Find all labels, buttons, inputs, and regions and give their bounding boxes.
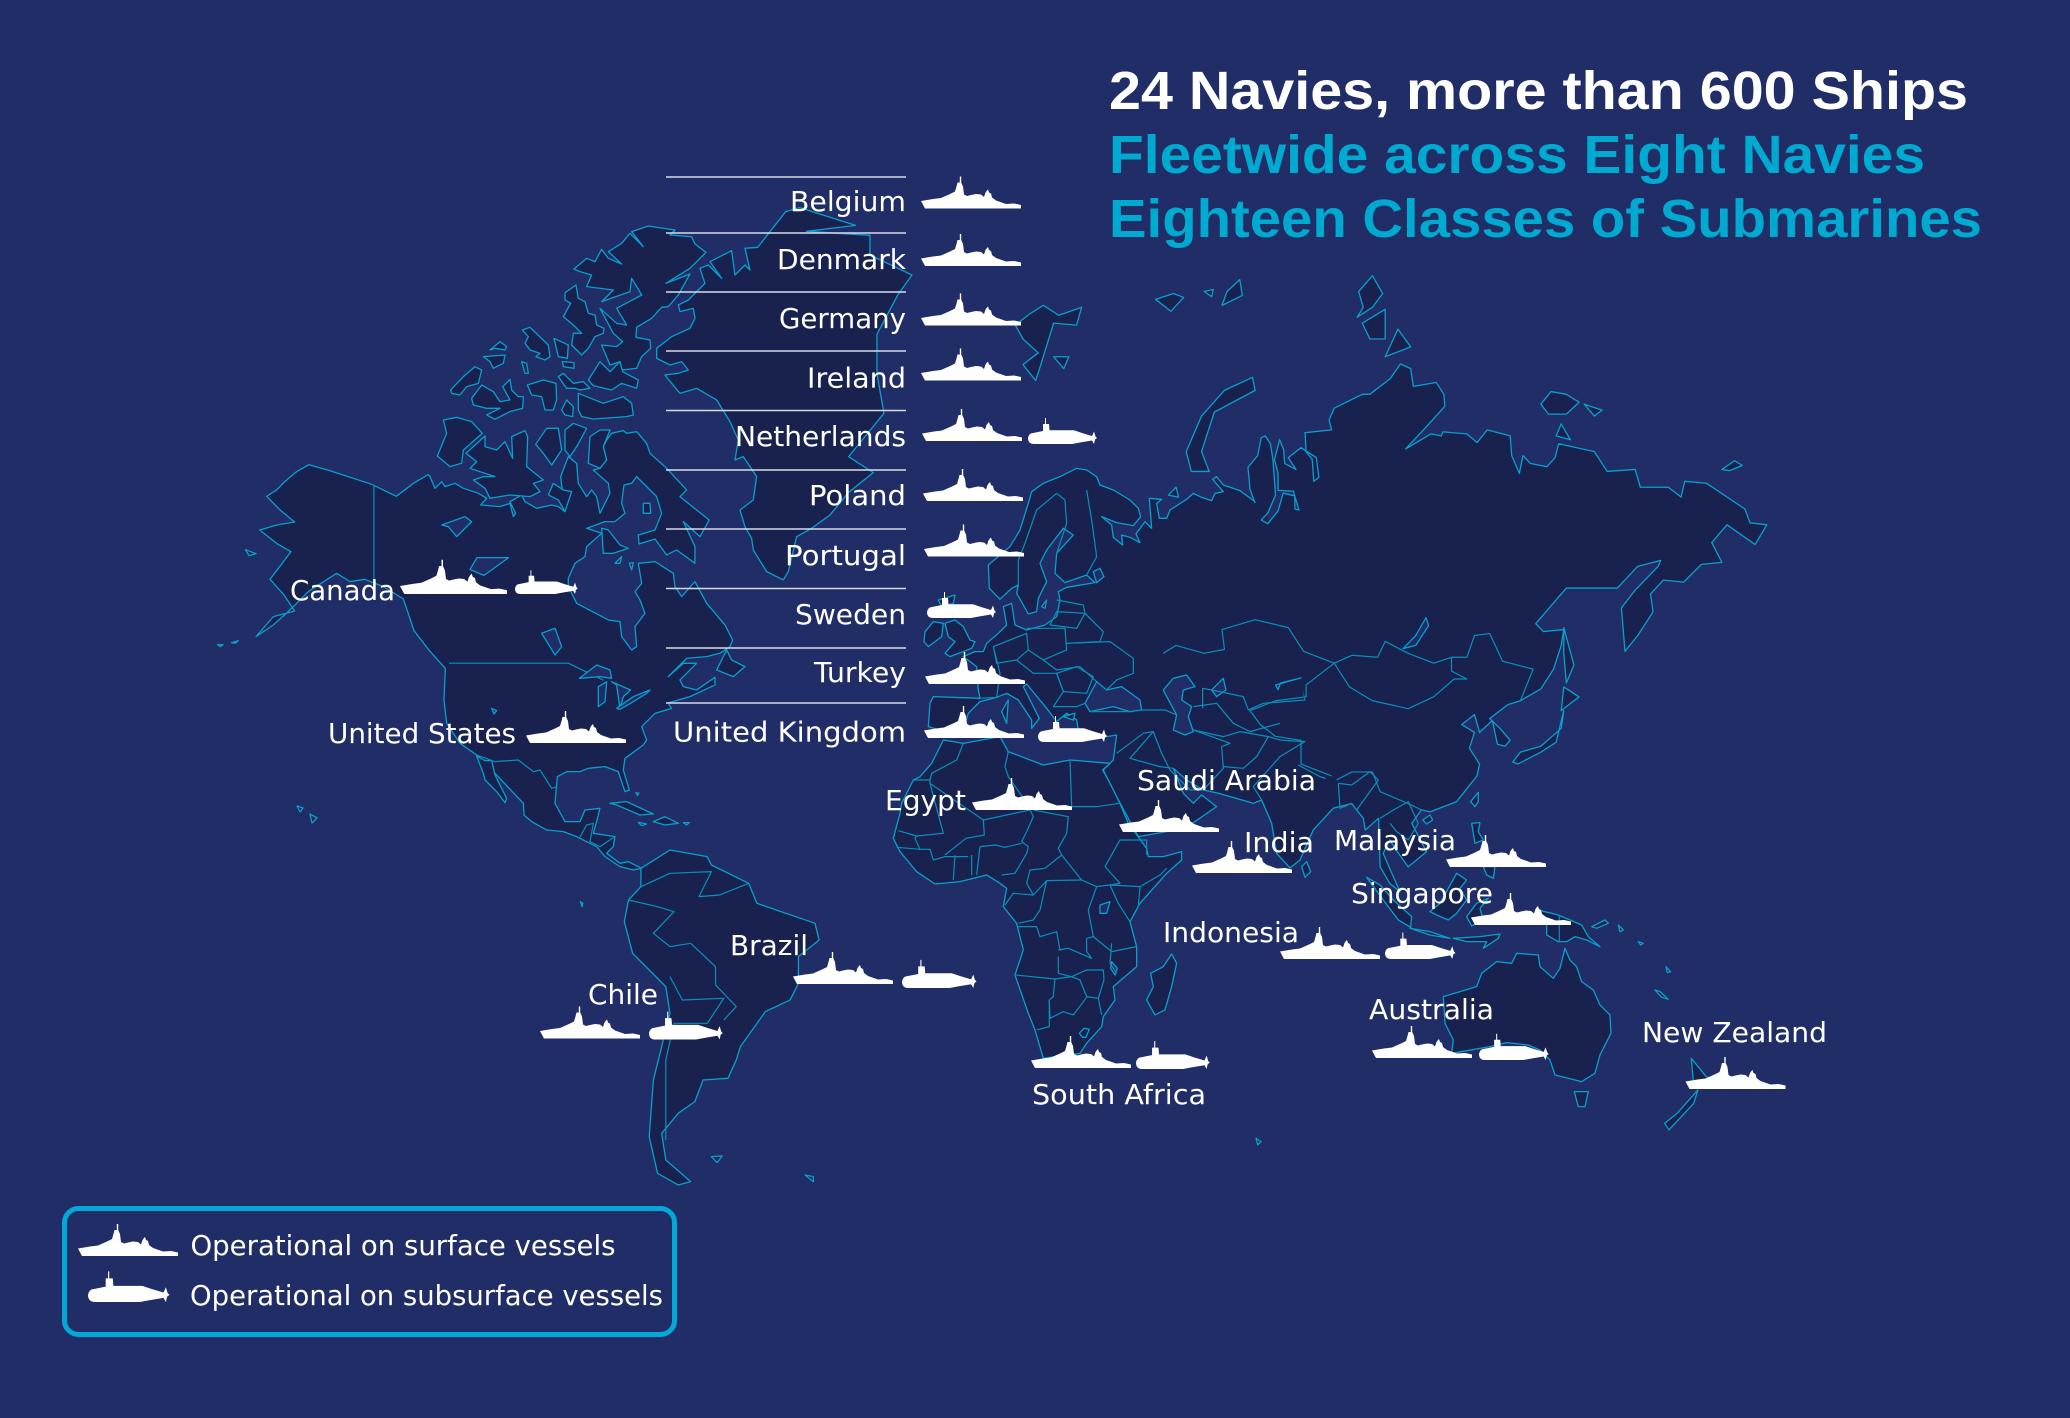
rule Ireland bbox=[666, 350, 906, 352]
icon: surface ship bbox=[793, 952, 893, 984]
sumatra bbox=[1367, 877, 1412, 927]
icon: surface ship bbox=[921, 294, 1021, 326]
ukraine bbox=[1043, 642, 1133, 690]
name: United Kingdom bbox=[673, 716, 906, 748]
poland bbox=[1027, 628, 1067, 660]
name: Netherlands bbox=[735, 420, 906, 453]
algeria bbox=[1005, 752, 1032, 810]
navy: Egypt bbox=[885, 778, 1072, 817]
norway sweden border bbox=[1018, 493, 1057, 585]
lake superior bbox=[579, 665, 612, 678]
name: Indonesia bbox=[1163, 916, 1299, 949]
ellesmere island bbox=[574, 226, 706, 370]
lake balkhash bbox=[1276, 678, 1301, 690]
lake: great bear bbox=[442, 517, 472, 537]
lake michigan bbox=[598, 682, 607, 707]
greenland bbox=[657, 208, 912, 580]
hudson bay islet bbox=[615, 557, 622, 563]
name: Australia bbox=[1369, 993, 1494, 1026]
new siberian islands bbox=[1541, 392, 1579, 414]
lake victoria bbox=[1100, 902, 1110, 913]
bylot island bbox=[588, 430, 610, 468]
map: hawaii bbox=[297, 806, 317, 823]
icon: submarine bbox=[1136, 1041, 1210, 1069]
icon: surface ship bbox=[400, 560, 507, 594]
navy: Poland bbox=[809, 469, 1023, 512]
gotland and baltic islands bbox=[1042, 600, 1047, 608]
name: Malaysia bbox=[1334, 824, 1456, 857]
name: Sweden bbox=[795, 598, 906, 631]
lesotho bbox=[1079, 1028, 1089, 1037]
navy: United States bbox=[328, 711, 626, 750]
falklands bbox=[711, 1156, 722, 1163]
arctic island c bbox=[522, 327, 550, 360]
legend icon: surface ship bbox=[78, 1224, 178, 1256]
benin togo bbox=[977, 847, 980, 875]
franz josef land east bbox=[1222, 280, 1242, 305]
rule Denmark bbox=[666, 232, 906, 234]
new caledonia bbox=[1655, 990, 1668, 999]
svalbard small bbox=[1054, 357, 1069, 369]
navy: Australia bbox=[1369, 993, 1549, 1060]
franz josef islets bbox=[1204, 290, 1213, 297]
mexico borders bbox=[477, 755, 557, 788]
legend bbox=[64, 1208, 674, 1334]
puerto rico bbox=[683, 823, 689, 825]
mauritania south bbox=[898, 783, 943, 836]
name: Canada bbox=[290, 574, 395, 607]
germany poland bbox=[993, 633, 1028, 663]
arctic island d bbox=[490, 342, 507, 350]
map: africa bbox=[893, 737, 1182, 1058]
name: Turkey bbox=[813, 656, 906, 689]
congo north bbox=[1018, 880, 1082, 923]
navy: New Zealand bbox=[1642, 1016, 1827, 1089]
icon: surface ship bbox=[972, 778, 1072, 810]
hokkaido bbox=[1561, 687, 1579, 711]
name: Saudi Arabia bbox=[1137, 764, 1316, 797]
icon: submarine bbox=[1038, 716, 1107, 742]
morocco bbox=[930, 743, 963, 780]
navy: Saudi Arabia bbox=[1119, 764, 1316, 832]
finland russia border bbox=[1087, 490, 1097, 575]
central asia bbox=[1203, 663, 1333, 710]
icon: surface ship bbox=[1686, 1057, 1786, 1089]
zambia bbox=[1058, 957, 1104, 980]
navy: Malaysia bbox=[1334, 824, 1546, 867]
black sea bbox=[1085, 682, 1142, 712]
navy: Sweden bbox=[795, 592, 996, 631]
luzon bbox=[1472, 823, 1483, 843]
congo east bbox=[1058, 887, 1097, 958]
name: New Zealand bbox=[1642, 1016, 1827, 1049]
victoria island bbox=[466, 431, 543, 498]
map: new zealand and pacific bbox=[1665, 1058, 1723, 1130]
king william island bbox=[548, 483, 572, 512]
solomon islands east bbox=[1638, 942, 1643, 945]
icon: surface ship bbox=[924, 706, 1024, 738]
java bbox=[1410, 928, 1450, 938]
kara sea island bbox=[1168, 487, 1179, 497]
map: mexico and caribbean bbox=[444, 665, 689, 870]
legend icon: submarine bbox=[88, 1271, 169, 1302]
africa outline bbox=[893, 737, 1182, 1058]
navy: Germany bbox=[779, 294, 1021, 335]
sulawesi bbox=[1467, 898, 1488, 926]
sri lanka bbox=[1302, 862, 1311, 877]
map: alaska and canada borders bbox=[217, 484, 603, 680]
name: South Africa bbox=[1032, 1078, 1206, 1111]
icon: surface ship bbox=[1372, 1026, 1472, 1058]
tasmania bbox=[1574, 1092, 1588, 1107]
bahamas bbox=[636, 793, 639, 796]
rule Turkey bbox=[666, 647, 906, 649]
arctic island h bbox=[588, 362, 638, 390]
bathurst island bbox=[527, 380, 557, 410]
ghana east bbox=[971, 855, 973, 875]
tanzania bbox=[1093, 937, 1137, 952]
name: Denmark bbox=[777, 243, 907, 276]
melville island bbox=[472, 379, 523, 419]
us canada border bbox=[449, 663, 603, 680]
borders of africa bbox=[897, 743, 1167, 1030]
seam fill: north america bbox=[446, 696, 664, 706]
hudson bay islet east bbox=[629, 563, 633, 570]
icon: submarine bbox=[927, 592, 996, 618]
icon: surface ship bbox=[921, 348, 1021, 380]
icon: surface ship bbox=[922, 409, 1022, 441]
icon: submarine bbox=[515, 570, 578, 594]
arctic island e bbox=[483, 355, 505, 368]
india north bbox=[1253, 737, 1305, 800]
arctic island b bbox=[562, 362, 574, 368]
south sudan ethiopia bbox=[1062, 855, 1167, 887]
icon: surface ship bbox=[925, 652, 1025, 684]
romania bulgaria bbox=[1057, 667, 1093, 693]
mozambique south bbox=[1098, 998, 1102, 1015]
icon: surface ship bbox=[1119, 800, 1219, 832]
prince patrick island bbox=[451, 367, 482, 395]
myanmar border bbox=[1338, 772, 1378, 810]
arctic island g bbox=[562, 400, 573, 417]
navy: Brazil bbox=[730, 929, 977, 988]
afghanistan pakistan bbox=[1193, 730, 1268, 768]
caucasus and iran bbox=[1153, 730, 1230, 790]
hispaniola bbox=[653, 817, 678, 825]
papua border bbox=[1558, 915, 1560, 942]
icon: submarine bbox=[1479, 1034, 1549, 1060]
madagascar bbox=[1147, 954, 1177, 1015]
libya egypt bbox=[1070, 760, 1072, 807]
icon: surface ship bbox=[540, 1006, 640, 1038]
title line 1: 24 Navies, more than 600 Ships bbox=[1109, 61, 1968, 121]
iceland bbox=[938, 595, 955, 607]
navy: Canada bbox=[290, 560, 578, 607]
title line 3: Eighteen Classes of Submarines bbox=[1109, 189, 1982, 249]
wrangel island bbox=[1722, 461, 1742, 471]
map: west eurasia bbox=[924, 468, 1380, 868]
kerguelen bbox=[1256, 1138, 1261, 1145]
balkans bbox=[1017, 660, 1085, 707]
name: Poland bbox=[809, 479, 906, 512]
severnaya zemlya north bbox=[1357, 276, 1383, 317]
rule Netherlands bbox=[666, 410, 906, 412]
solomon islands bbox=[1618, 925, 1623, 932]
scandinavia borders bbox=[1057, 493, 1067, 553]
lake huron bbox=[612, 682, 631, 708]
mindanao bbox=[1483, 867, 1495, 878]
ethiopia south bbox=[1105, 867, 1120, 885]
ghana west bbox=[953, 855, 955, 880]
baltic states bbox=[1050, 600, 1103, 643]
foxe basin island bbox=[643, 503, 651, 513]
icon: surface ship bbox=[921, 176, 1021, 208]
lake baikal bbox=[1403, 618, 1429, 649]
brazil west border bbox=[628, 900, 736, 1020]
icon: surface ship bbox=[1192, 841, 1292, 873]
prince of wales island bbox=[536, 428, 562, 465]
name: Singapore bbox=[1351, 877, 1493, 910]
rule Germany bbox=[666, 291, 906, 293]
argentina chile border bbox=[666, 977, 724, 1140]
aral sea bbox=[1212, 678, 1226, 697]
aleutian islands west bbox=[217, 645, 223, 647]
world map bbox=[217, 208, 1767, 1185]
somalia bbox=[1138, 887, 1140, 907]
ireland bbox=[924, 622, 943, 647]
icon: surface ship bbox=[526, 711, 626, 743]
great britain bbox=[945, 620, 975, 657]
name: Portugal bbox=[785, 539, 906, 572]
malawi bbox=[1110, 943, 1117, 973]
turkey south bbox=[1090, 710, 1177, 715]
icon: surface ship bbox=[923, 469, 1023, 501]
rule Sweden bbox=[666, 588, 906, 590]
taiwan bbox=[1471, 792, 1478, 807]
ethiopia west bbox=[1105, 840, 1147, 867]
navy: Denmark bbox=[777, 234, 1021, 276]
hawaii big island bbox=[310, 814, 317, 823]
somerset island bbox=[565, 423, 587, 457]
mongolia border bbox=[1334, 657, 1467, 709]
axel heiberg island bbox=[563, 285, 604, 355]
navy: Singapore bbox=[1351, 877, 1571, 925]
severnaya zemlya middle bbox=[1362, 309, 1385, 339]
syria iraq saudi bbox=[1117, 732, 1173, 768]
arctic island f bbox=[522, 362, 528, 373]
namibia bbox=[1037, 979, 1055, 1030]
ivory coast bbox=[920, 849, 968, 860]
nigeria north bbox=[980, 843, 1022, 847]
name: Chile bbox=[588, 978, 658, 1011]
title line 2: Fleetwide across Eight Navies bbox=[1109, 125, 1925, 185]
icon: surface ship bbox=[1280, 927, 1380, 959]
botswana south bbox=[1049, 997, 1087, 1018]
sudan bbox=[1027, 810, 1068, 895]
list of european navies bbox=[666, 176, 1107, 748]
rule Portugal bbox=[666, 528, 906, 530]
honshu bbox=[1513, 711, 1564, 764]
name: Ireland bbox=[807, 362, 906, 394]
aleutian islands bbox=[231, 641, 239, 643]
borneo bbox=[1430, 873, 1467, 920]
name: United States bbox=[328, 717, 516, 750]
angola north bbox=[1018, 927, 1067, 950]
lake: winnipeg bbox=[542, 628, 562, 655]
icon: surface ship bbox=[1031, 1036, 1131, 1068]
navy: Ireland bbox=[807, 348, 1021, 394]
niger chad bbox=[983, 810, 1033, 875]
navy: Portugal bbox=[785, 524, 1024, 572]
south island bbox=[1665, 1090, 1698, 1130]
baja california bbox=[477, 756, 507, 803]
hainan bbox=[1423, 815, 1433, 824]
newfoundland bbox=[717, 650, 745, 677]
alaska border bbox=[373, 484, 375, 579]
lake ladoga bbox=[1093, 568, 1104, 583]
banks island bbox=[437, 417, 482, 467]
navy: South Africa bbox=[1031, 1036, 1210, 1111]
devon island bbox=[578, 393, 633, 419]
navy: Chile bbox=[540, 978, 723, 1040]
svalbard bbox=[1015, 305, 1082, 380]
russia border bbox=[1163, 620, 1533, 701]
kenya bbox=[1110, 885, 1130, 922]
name: Belgium bbox=[790, 185, 906, 218]
legend text: surface: Operational on surface vessels bbox=[190, 1229, 616, 1262]
new britain bbox=[1592, 920, 1608, 928]
legend frame bbox=[64, 1208, 674, 1334]
icon: submarine bbox=[1028, 418, 1097, 444]
southampton island bbox=[602, 528, 628, 553]
icon: surface ship bbox=[924, 524, 1024, 556]
north island bbox=[1691, 1058, 1723, 1087]
name: Germany bbox=[779, 302, 906, 335]
stans bbox=[1193, 703, 1280, 732]
galapagos bbox=[580, 902, 583, 907]
navy: Turkey bbox=[813, 652, 1025, 689]
egypt sudan bbox=[1072, 803, 1120, 807]
vietnam laos border bbox=[1380, 802, 1418, 840]
south georgia bbox=[805, 1175, 813, 1182]
seam fill: eurasia bbox=[1255, 502, 1341, 808]
gabon cameroon bbox=[1005, 881, 1047, 905]
cornwallis island bbox=[558, 373, 590, 390]
icon: surface ship bbox=[1446, 835, 1546, 867]
icon: surface ship bbox=[921, 234, 1021, 266]
new siberian east bbox=[1584, 404, 1602, 416]
new guinea bbox=[1537, 910, 1600, 947]
navy: India bbox=[1192, 826, 1314, 873]
russia china and south east asia bbox=[1248, 364, 1767, 892]
great salt lake bbox=[492, 708, 497, 714]
icon: submarine bbox=[902, 960, 977, 988]
navy: Indonesia bbox=[1163, 916, 1455, 959]
map: south america bbox=[580, 850, 1261, 1185]
se asia borders bbox=[1337, 772, 1421, 810]
legend text: subsurface: Operational on subsurface vessels bbox=[190, 1279, 663, 1312]
map: east eurasia bbox=[1015, 276, 1767, 892]
novaya zemlya bbox=[1186, 377, 1255, 471]
european and asian borders bbox=[980, 490, 1380, 800]
himalaya bbox=[1298, 765, 1380, 785]
australia bbox=[1443, 948, 1611, 1082]
crete and aegean bbox=[1063, 713, 1075, 720]
lake erie bbox=[617, 690, 650, 709]
mauritania mali bbox=[913, 780, 984, 855]
severnaya zemlya south bbox=[1385, 329, 1411, 357]
name: Egypt bbox=[885, 784, 966, 817]
vanuatu bbox=[1666, 967, 1671, 973]
colombia venezuela borders bbox=[641, 872, 749, 897]
navy: Belgium bbox=[790, 176, 1021, 218]
china west border bbox=[1250, 663, 1334, 776]
name: India bbox=[1244, 826, 1314, 859]
navy: United Kingdom bbox=[673, 706, 1107, 748]
hawaii islands bbox=[297, 806, 303, 812]
canada and alaska mainland bbox=[256, 431, 733, 703]
icon: surface ship bbox=[1471, 893, 1571, 925]
angola south bbox=[1015, 975, 1104, 998]
kodiak bbox=[246, 550, 256, 556]
central america borders bbox=[579, 823, 615, 847]
navy: Netherlands bbox=[735, 409, 1097, 453]
rule Belgium bbox=[666, 176, 906, 178]
us mexico and central america bbox=[444, 700, 672, 870]
map: north america and arctic bbox=[256, 208, 912, 703]
franz josef land bbox=[1156, 293, 1184, 311]
sardinia bbox=[1002, 700, 1008, 723]
caspian sea bbox=[1163, 675, 1195, 735]
lake malawi bbox=[1111, 962, 1117, 975]
lesser sunda islands bbox=[1453, 934, 1500, 948]
rule Poland bbox=[666, 469, 906, 471]
small arctic island bbox=[1556, 424, 1570, 440]
icon: submarine bbox=[649, 1012, 723, 1040]
map: oceania and south east asia islands bbox=[1302, 772, 1671, 1107]
arctic island a bbox=[554, 338, 568, 358]
sakhalin bbox=[1564, 628, 1574, 683]
france spain bbox=[980, 647, 1000, 698]
name: Brazil bbox=[730, 929, 808, 962]
icon: submarine bbox=[1385, 932, 1455, 959]
guinea bbox=[897, 836, 920, 849]
rule United Kingdom bbox=[666, 702, 906, 704]
lake: great slave bbox=[470, 558, 509, 575]
europe middle east and india bbox=[928, 468, 1333, 868]
cuba bbox=[610, 802, 653, 815]
heading block bbox=[1109, 61, 1982, 249]
south america outline bbox=[624, 850, 819, 1185]
jamaica bbox=[638, 822, 647, 826]
